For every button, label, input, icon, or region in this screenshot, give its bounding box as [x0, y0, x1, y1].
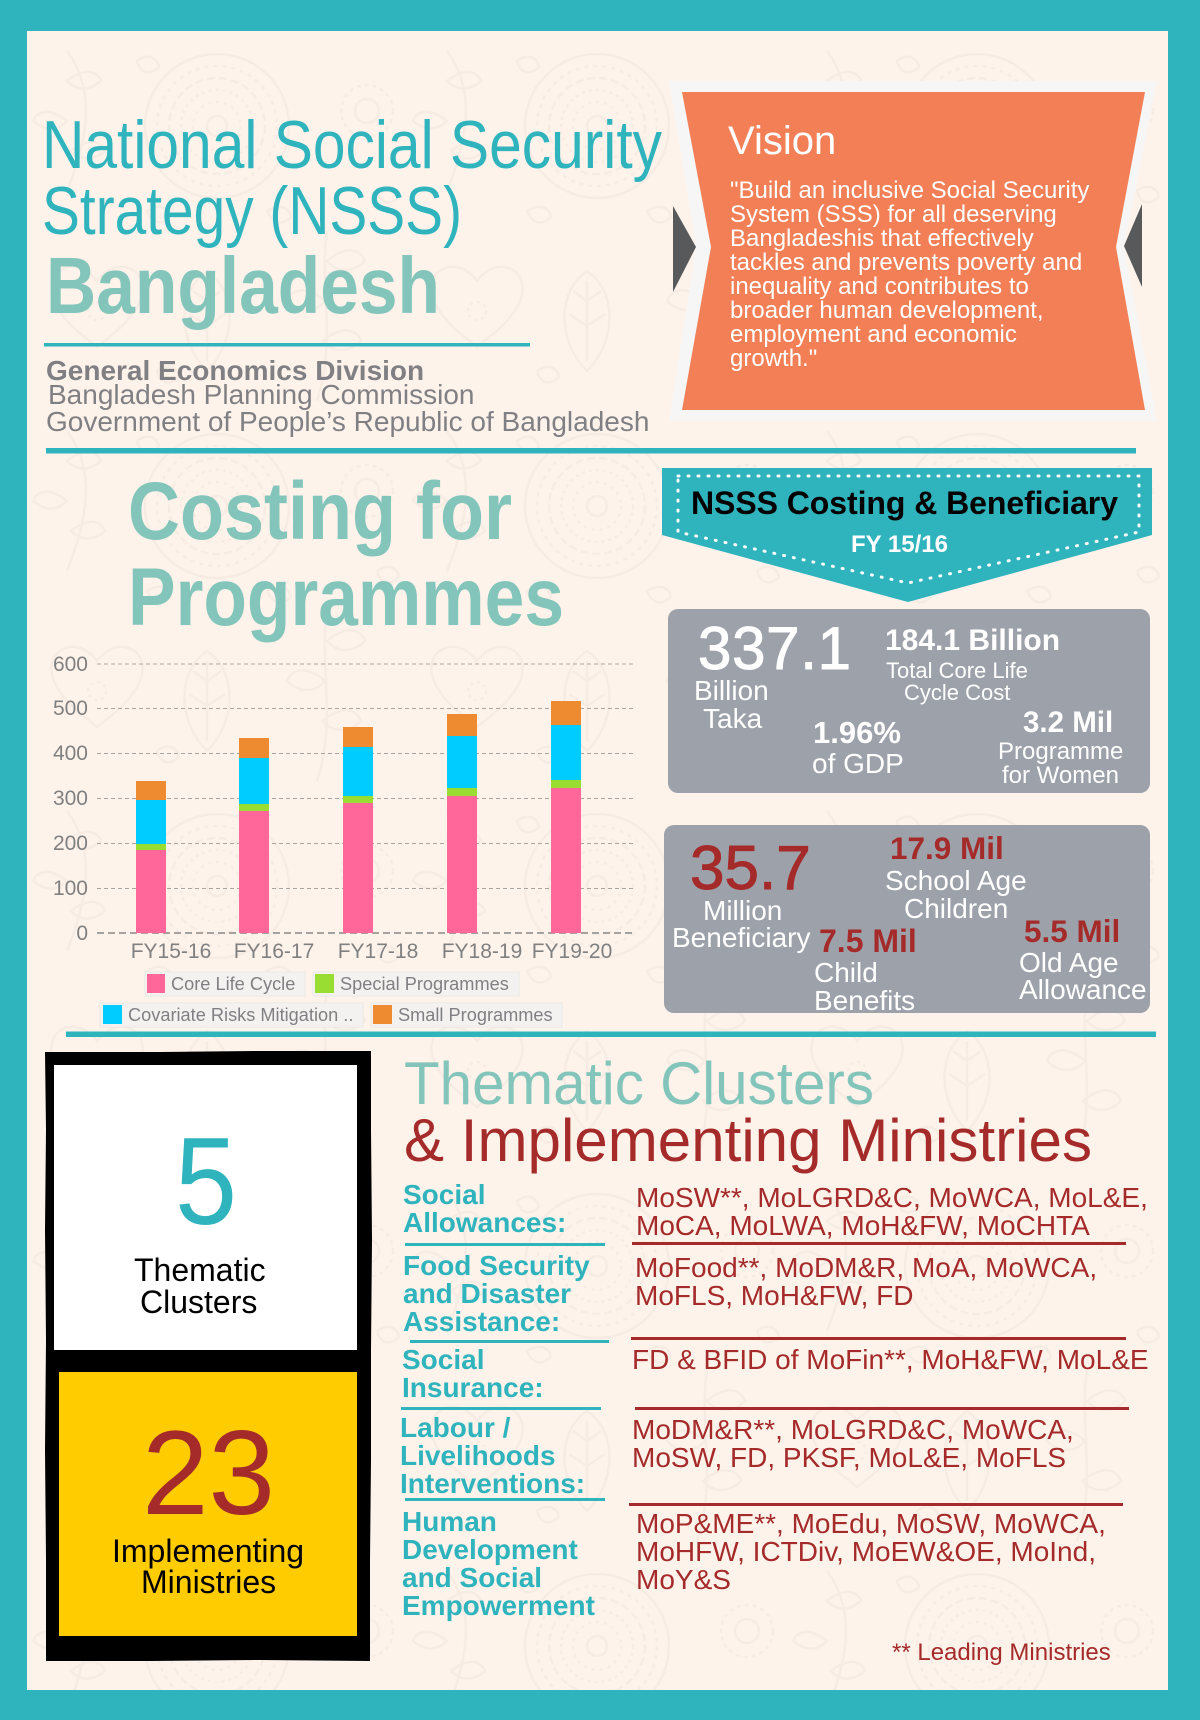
card: thematic clusters: Thematic: [134, 1252, 266, 1288]
x axis labels: FY15-16: [131, 940, 211, 963]
y axis labels: 100: [53, 877, 88, 900]
stat: 184.1 billion: 184.1 Billion: [885, 624, 1060, 657]
vision statement: [730, 177, 1089, 372]
cluster: food security and disaster assistance: Food Security: [403, 1250, 590, 1281]
heading: Costing for Programmes: [128, 466, 564, 643]
stat: 1.96% of GDP: 1.96%: [813, 715, 901, 750]
title: National Social Security Strategy: National Social Security: [42, 107, 662, 183]
cluster: social insurance: FD & BFID of MoFin**, MoH&FW, MoL&E: [632, 1344, 1149, 1375]
vision statement: System (SSS) for all deserving: [730, 201, 1057, 228]
cluster: human development and social empowerment: Human: [402, 1506, 497, 1537]
cluster: social allowances: Allowances:: [403, 1207, 566, 1238]
stat: 7.5 Mil: 7.5 Mil: [819, 923, 917, 959]
cluster: labour and livelihoods interventions: [400, 1412, 1123, 1506]
stat: 5.5 Mil: Old Age: [1019, 947, 1119, 978]
icon: left arrow: [673, 206, 696, 292]
vision statement: growth.": [730, 345, 817, 372]
bar FY17-18: [343, 727, 373, 933]
cluster: human development and social empowerment: MoHFW, ICTDiv, MoEW&OE, MoInd,: [636, 1536, 1096, 1567]
cluster: food security and disaster assistance: MoFLS, MoH&FW, FD: [635, 1280, 913, 1311]
stat: 3.2 Mil: for Women: [1002, 762, 1119, 789]
stat: 1.96% of GDP: of GDP: [812, 748, 904, 779]
y axis labels: 0: [76, 922, 88, 945]
y axis labels: 600: [53, 653, 88, 676]
stat: 7.5 Mil: Child: [814, 957, 878, 988]
cluster: labour and livelihoods interventions: Livelihoods: [400, 1440, 556, 1471]
title block: [42, 107, 662, 437]
y axis labels: 200: [53, 832, 88, 855]
icon: right arrow: [1124, 204, 1142, 287]
vision heading: Vision: [728, 119, 836, 163]
card: implementing ministries: 23: [142, 1406, 275, 1540]
cluster: human development and social empowerment: and Social: [402, 1562, 542, 1593]
publisher text: General Economics Division: [46, 355, 424, 386]
bar FY18-19: [447, 714, 477, 933]
y axis labels: 300: [53, 787, 88, 810]
title: National Social Security Strategy: Strategy (NSSS): [42, 173, 462, 249]
x axis labels: FY18-19: [442, 940, 522, 963]
stat: 337.1 billion taka: 337.1: [698, 615, 851, 682]
cluster: labour and livelihoods interventions: MoDM&R**, MoLGRD&C, MoWCA,: [632, 1414, 1074, 1445]
ribbon: NSSS Costing and Beneficiary: NSSS Costing & Beneficiary: [691, 485, 1118, 521]
vision statement: broader human development,: [730, 297, 1044, 324]
stat: 5.5 Mil: Allowance: [1019, 974, 1147, 1005]
footnote: ** Leading Ministries: [892, 1639, 1111, 1666]
cluster: labour and livelihoods interventions: Interventions:: [400, 1468, 585, 1499]
title: National Social Security Strategy: [42, 107, 662, 249]
vision statement: inequality and contributes to: [730, 273, 1029, 300]
stat: 17.9 Mil: 17.9 Mil: [890, 830, 1004, 866]
cluster: food security and disaster assistance: [403, 1250, 1126, 1343]
y axis labels: 500: [53, 697, 88, 720]
panel: vision: [669, 81, 1157, 421]
legend: Special Programmes: [340, 974, 509, 994]
cluster: food security and disaster assistance: MoFood**, MoDM&R, MoA, MoWCA,: [635, 1252, 1097, 1283]
stat: 35.7 million beneficiary: [672, 834, 811, 953]
legend: Small Programmes: [398, 1005, 553, 1025]
y axis labels: [53, 653, 88, 945]
bar FY16-17: [239, 738, 269, 933]
stat: 3.2 Mil: Programme: [998, 738, 1123, 765]
x axis labels: FY19-20: [532, 940, 612, 963]
card: implementing ministries: Ministries: [141, 1564, 276, 1600]
stat: 17.9 Mil: School Age: [885, 865, 1027, 896]
legend: Core Life Cycle: [171, 974, 295, 994]
publisher text: Government of People’s Republic of Bangladesh: [46, 406, 649, 437]
cluster: labour and livelihoods interventions: MoSW, FD, PKSF, MoL&E, MoFLS: [632, 1442, 1066, 1473]
stat: 5.5 Mil: 5.5 Mil: [1024, 913, 1120, 949]
ribbon: NSSS Costing and Beneficiary: [662, 468, 1152, 602]
heading: Thematic Clusters and Implementing Ministries: Thematic Clusters: [404, 1050, 874, 1117]
y axis labels: 400: [53, 742, 88, 765]
x axis labels: FY16-17: [234, 940, 314, 963]
stat: 337.1 billion taka: Taka: [703, 703, 763, 734]
panel: cost stats: [668, 609, 1150, 793]
stat: 184.1 billion: [885, 624, 1060, 705]
legend: [100, 972, 562, 1027]
stat: 17.9 Mil: Children: [904, 893, 1008, 924]
stat: 184.1 billion: Cycle Cost: [904, 680, 1010, 705]
cluster: social allowances: MoCA, MoLWA, MoH&FW, MoCHTA: [636, 1210, 1090, 1241]
stat: 7.5 Mil: [814, 923, 917, 1016]
panel: beneficiary stats: [664, 825, 1150, 1016]
panel: key counts: [45, 1051, 372, 1661]
bar FY15-16: [136, 781, 166, 933]
stat: 3.2 Mil: [998, 706, 1123, 789]
stat: 17.9 Mil: [885, 830, 1027, 924]
cluster: social insurance: Insurance:: [402, 1372, 544, 1403]
cluster: social allowances: MoSW**, MoLGRD&C, MoWCA, MoL&E,: [636, 1182, 1148, 1213]
stat: 35.7 million beneficiary: Beneficiary: [672, 922, 811, 953]
stat: 184.1 billion: Total Core Life: [886, 658, 1028, 683]
bar FY19-20: [551, 701, 581, 933]
heading: Costing for Programmes: Costing for: [128, 466, 512, 557]
cluster: social insurance: Social: [402, 1344, 484, 1375]
cluster: human development and social empowerment: MoP&ME**, MoEdu, MoSW, MoWCA,: [636, 1508, 1106, 1539]
stacked bar chart: [53, 653, 634, 1027]
card: thematic clusters: Clusters: [140, 1284, 257, 1320]
card: thematic clusters: 5: [175, 1113, 237, 1251]
heading: Costing for Programmes: Programmes: [128, 552, 564, 643]
vision statement: tackles and prevents poverty and: [730, 249, 1082, 276]
cluster: social allowances: Social: [403, 1179, 485, 1210]
heading: Thematic Clusters and Implementing Ministries: [404, 1050, 1092, 1174]
vision statement: "Build an inclusive Social Security: [730, 177, 1089, 204]
card: thematic clusters: [54, 1065, 357, 1350]
ribbon: NSSS Costing and Beneficiary: FY 15/16: [851, 531, 948, 558]
cluster: food security and disaster assistance: Assistance:: [403, 1306, 560, 1337]
x axis labels: FY17-18: [338, 940, 418, 963]
stat: 3.2 Mil: 3.2 Mil: [1023, 706, 1113, 739]
stat: 337.1 billion taka: [694, 615, 851, 734]
cluster: human development and social empowerment: Development: [402, 1534, 578, 1565]
stat: 7.5 Mil: Benefits: [814, 985, 915, 1016]
stat: 35.7 million beneficiary: Million: [703, 895, 782, 926]
legend: Covariate Risks Mitigation ..: [128, 1005, 353, 1025]
cluster: social insurance: [401, 1344, 1149, 1410]
cluster: labour and livelihoods interventions: Labour /: [400, 1412, 511, 1443]
cluster: food security and disaster assistance: and Disaster: [403, 1278, 571, 1309]
cluster: social allowances: [403, 1179, 1148, 1246]
stat: 35.7 million beneficiary: 35.7: [690, 834, 811, 903]
cluster: human development and social empowerment: MoY&S: [636, 1564, 731, 1595]
publisher text: [46, 355, 649, 437]
stat: 337.1 billion taka: Billion: [694, 675, 769, 706]
cluster: human development and social empowerment: [402, 1506, 1106, 1621]
heading: Thematic Clusters and Implementing Ministries: & Implementing Ministries: [404, 1107, 1092, 1174]
x axis labels: [131, 940, 612, 963]
title: Bangladesh: Bangladesh: [46, 241, 440, 330]
card: implementing ministries: Implementing: [112, 1533, 304, 1569]
publisher text: Bangladesh Planning Commission: [48, 379, 474, 410]
stat: 1.96% of GDP: [812, 715, 904, 779]
card: implementing ministries: [59, 1372, 357, 1636]
vision statement: Bangladeshis that effectively: [730, 225, 1034, 252]
vision statement: employment and economic: [730, 321, 1017, 348]
cluster: human development and social empowerment: Empowerment: [402, 1590, 595, 1621]
stat: 5.5 Mil: [1019, 913, 1147, 1005]
